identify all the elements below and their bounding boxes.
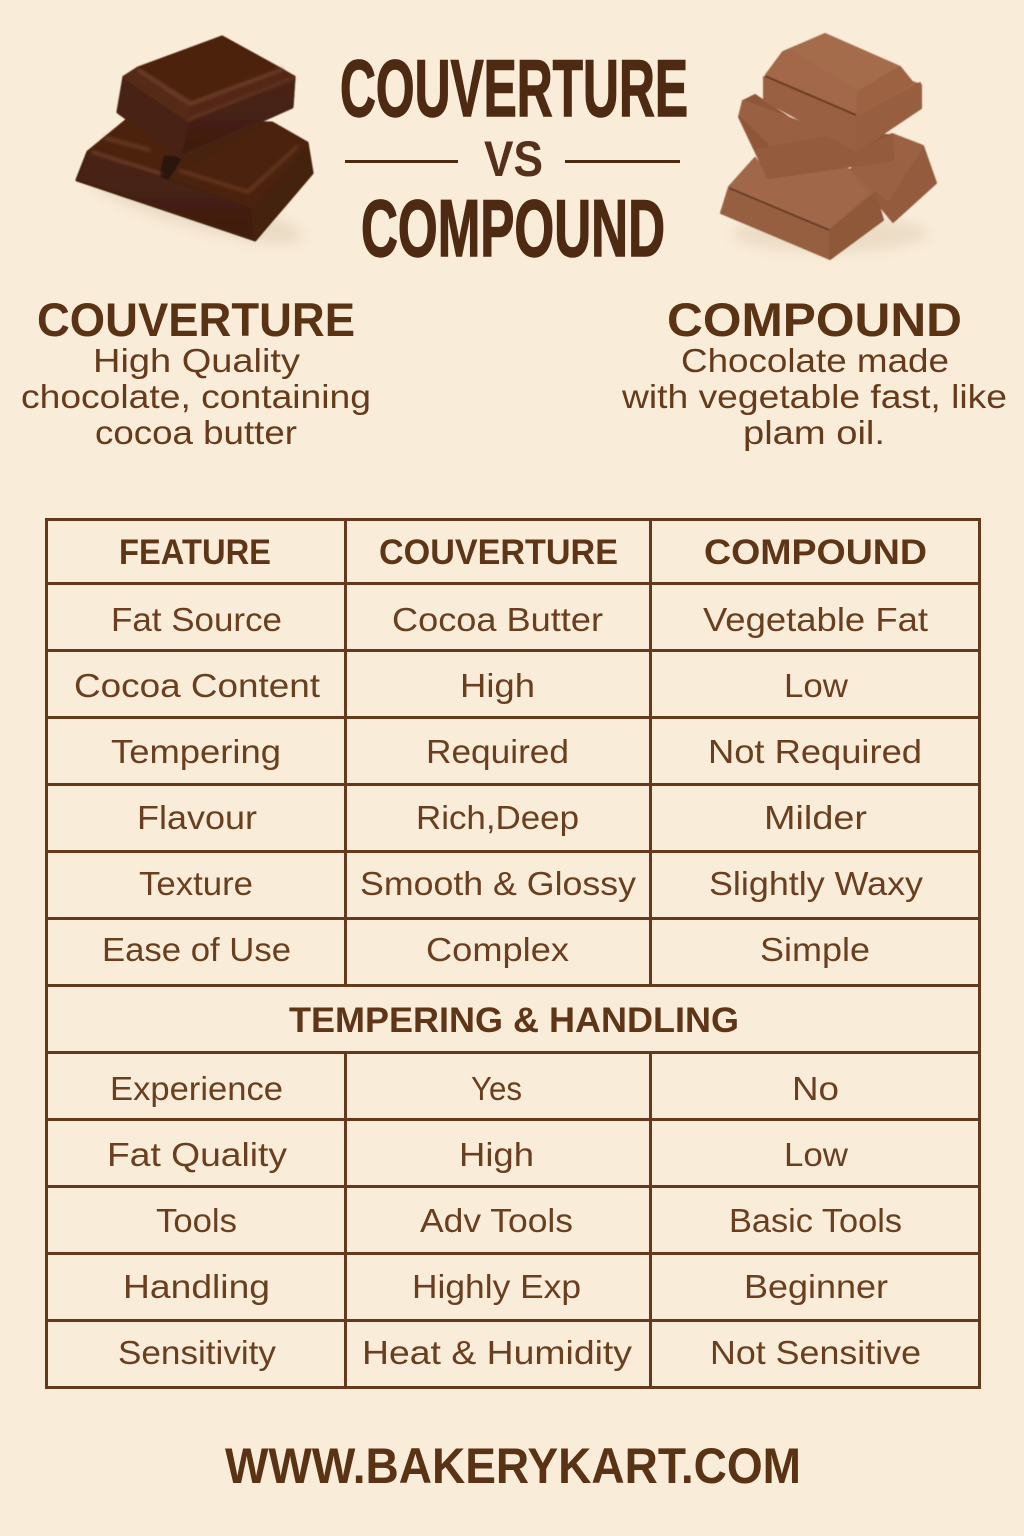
row: texture: Slightly Waxy [709, 865, 924, 902]
row: sensitivity: Sensitivity [118, 1334, 277, 1371]
table header row [119, 533, 927, 572]
row: cocoa content: High [460, 667, 535, 704]
row: experience [110, 1070, 839, 1107]
table header row: COMPOUND [704, 533, 927, 572]
panel: compound description: with vegetable fast, like [621, 378, 1007, 415]
row: tempering: Not Required [708, 733, 922, 770]
row: tools: Tools [156, 1202, 237, 1239]
row: flavour: Milder [764, 799, 867, 836]
panel: compound description [621, 293, 1007, 451]
row: fat source: Vegetable Fat [703, 601, 928, 638]
title: Couverture vs Compound: VS [484, 131, 543, 187]
row: ease of use: Complex [426, 931, 570, 968]
panel: couverture description: chocolate, containing [21, 378, 371, 415]
row: ease of use: Ease of Use [102, 931, 291, 968]
row: flavour [137, 799, 867, 836]
row: tools [156, 1202, 902, 1239]
row: texture: Smooth & Glossy [360, 865, 637, 902]
footer: website: WWW.BAKERYKART.COM [225, 1438, 801, 1494]
row: fat quality [107, 1136, 848, 1173]
panel: compound description: plam oil. [743, 414, 885, 451]
table header row: COUVERTURE [379, 533, 618, 572]
row: flavour: Rich,Deep [416, 799, 579, 836]
row: sensitivity: Heat & Humidity [362, 1334, 633, 1371]
row: handling [123, 1268, 888, 1305]
row: cocoa content: Low [784, 667, 848, 704]
row: cocoa content: Cocoa Content [74, 667, 320, 704]
panel: compound description: COMPOUND [667, 293, 962, 346]
panel: couverture description: cocoa butter [95, 414, 297, 451]
row: flavour: Flavour [137, 799, 257, 836]
row: fat source: Cocoa Butter [392, 601, 603, 638]
row: experience: No [792, 1070, 839, 1107]
icon: dark couverture chocolate pieces [77, 37, 312, 258]
table header row: FEATURE [119, 533, 271, 572]
panel: couverture description: High Quality [93, 342, 301, 379]
title: Couverture vs Compound: COMPOUND [361, 184, 665, 274]
row: experience: Yes [471, 1070, 522, 1107]
row: tempering: Required [426, 733, 569, 770]
row: texture [139, 865, 924, 902]
panel: compound description: Chocolate made [681, 342, 949, 379]
row: fat source: Fat Source [111, 601, 282, 638]
row: experience: Experience [110, 1070, 283, 1107]
row: tools: Adv Tools [420, 1202, 573, 1239]
row: sensitivity: Not Sensitive [710, 1334, 921, 1371]
row: handling: Beginner [744, 1268, 888, 1305]
row: ease of use [102, 931, 870, 968]
table grid [46, 519, 980, 1388]
row: handling: Highly Exp [412, 1268, 581, 1305]
panel: couverture description: COUVERTURE [37, 293, 355, 346]
row: texture: Texture [139, 865, 253, 902]
row: tempering [111, 733, 922, 770]
row: fat quality: Low [784, 1136, 848, 1173]
row: ease of use: Simple [760, 931, 870, 968]
row: cocoa content [74, 667, 848, 704]
panel: couverture description [21, 293, 371, 451]
row: fat quality: High [459, 1136, 534, 1173]
icon: milk compound chocolate pieces [721, 34, 936, 259]
row: tools: Basic Tools [729, 1202, 902, 1239]
row: tempering: Tempering [111, 733, 281, 770]
row: sensitivity [118, 1334, 921, 1371]
row: handling: Handling [123, 1268, 270, 1305]
row: fat quality: Fat Quality [107, 1136, 288, 1173]
row: fat source [111, 601, 928, 638]
comparison table [46, 519, 980, 1388]
title: Couverture vs Compound [340, 44, 688, 274]
title: Couverture vs Compound: COUVERTURE [340, 44, 688, 134]
section heading: tempering and handling: TEMPERING & HANDLING [289, 1001, 739, 1040]
